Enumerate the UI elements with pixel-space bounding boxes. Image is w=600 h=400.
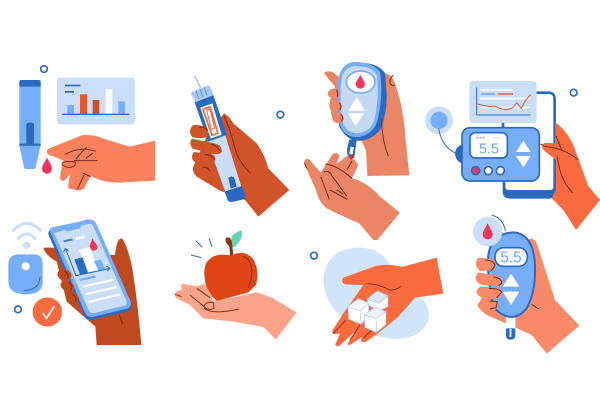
scene: lancet, finger and chart bbox=[19, 66, 155, 190]
icon: ring bbox=[277, 111, 284, 118]
scene: apple on open hand bbox=[175, 230, 297, 340]
chart card bbox=[57, 78, 135, 124]
hand: fingers gripping meter bbox=[328, 75, 395, 156]
scene: sensor, monitor and phone in hand bbox=[425, 81, 600, 230]
glucose reading: 5.5 bbox=[500, 249, 522, 266]
hand: pointing finger bbox=[47, 135, 155, 190]
scene: hand-held glucose meter bbox=[473, 215, 579, 354]
icon: apple bbox=[204, 230, 257, 301]
chart card bbox=[469, 81, 537, 128]
background blob bbox=[323, 248, 429, 339]
hand: holding cubes bbox=[332, 258, 443, 347]
hand: holding phone bbox=[541, 123, 600, 230]
icon: check badge bbox=[33, 297, 62, 327]
glucose reading: 5.5 bbox=[479, 142, 499, 158]
glucose test strip bbox=[506, 315, 515, 340]
hand: back of hand bbox=[193, 113, 289, 217]
icon: ring bbox=[570, 89, 577, 96]
scene: glucose meter on fingertip bbox=[304, 62, 409, 240]
icon: wearable sensor bbox=[8, 254, 43, 294]
hand: fingers around pen bbox=[190, 116, 251, 175]
hand: holding phone bbox=[43, 238, 141, 345]
icon: blood drop bbox=[42, 158, 52, 174]
scene: sugar cubes on hand bbox=[311, 248, 443, 347]
hand: pricked finger bbox=[304, 153, 400, 240]
icon: insulin pen bbox=[191, 76, 246, 202]
scene: insulin pen in hand bbox=[190, 76, 289, 217]
icon: wifi signal bbox=[13, 223, 41, 249]
hand: fingers gripping meter bbox=[476, 258, 539, 312]
icon: lancet device bbox=[19, 80, 41, 169]
phone frame bbox=[503, 91, 556, 199]
glucose monitor bbox=[455, 128, 539, 181]
hand: open palm bbox=[175, 284, 297, 340]
icon: ring bbox=[41, 66, 47, 72]
icon: motion ticks bbox=[191, 238, 212, 258]
hand: fingers on phone bbox=[56, 267, 123, 324]
scene: phone app with wifi tracker bbox=[8, 220, 141, 345]
icon: sugar cubes bbox=[348, 291, 388, 332]
icon: ring bbox=[15, 306, 21, 313]
smartphone bbox=[48, 220, 131, 320]
icon: skin sensor bbox=[425, 106, 456, 153]
hand: palm bbox=[478, 238, 579, 354]
icon: blood drop badge bbox=[473, 215, 505, 246]
hand: holding meter bbox=[324, 71, 409, 176]
icon: glucose meter bbox=[337, 62, 387, 157]
icon: ring bbox=[311, 252, 317, 259]
